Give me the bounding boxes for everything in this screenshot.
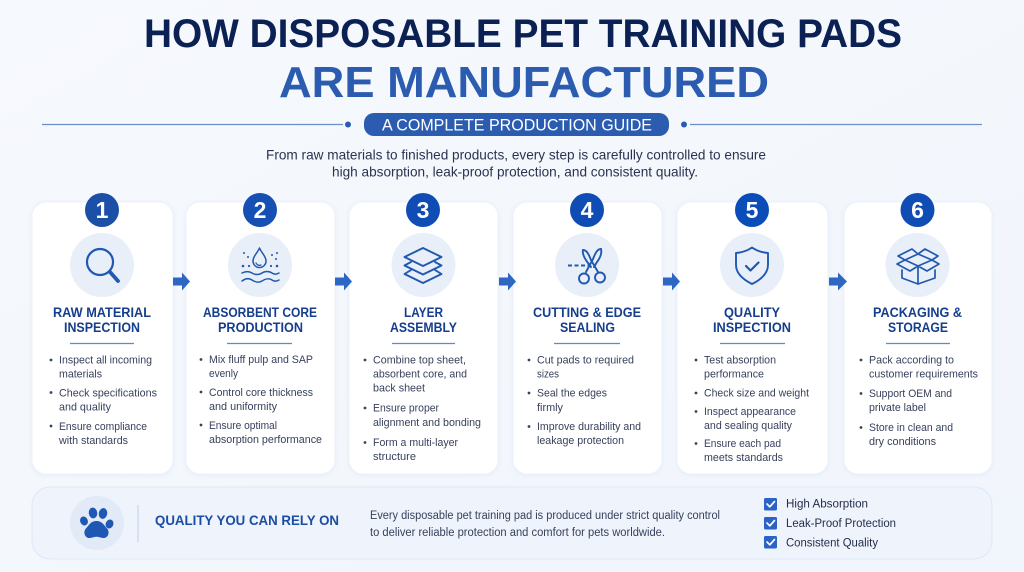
heading: INSPECTION — [713, 320, 791, 335]
title: ARE MANUFACTURED — [279, 58, 769, 107]
bullet list — [860, 354, 978, 448]
bullet list: sizes — [537, 368, 559, 380]
bullet list: Form a multi-layer — [373, 437, 458, 449]
heading: STORAGE — [888, 320, 948, 335]
arrow 4 to 5 — [663, 272, 680, 290]
step number 6 — [900, 193, 934, 227]
bullet list: Inspect appearance — [704, 406, 796, 418]
bullet list: with standards — [58, 435, 128, 447]
icon: magnifying glass — [70, 233, 134, 297]
subtitle banner: A COMPLETE PRODUCTION GUIDE — [382, 116, 652, 134]
bullet list: alignment and bonding — [373, 417, 481, 429]
checklist: High Absorption — [786, 498, 868, 510]
bullet list: back sheet — [373, 382, 425, 394]
bullet list — [364, 354, 481, 463]
arrow 5 to 6 — [829, 272, 847, 290]
icon: paw print — [70, 496, 124, 550]
panel: quality you can rely on — [32, 487, 992, 559]
bullet list: firmly — [537, 402, 563, 414]
callout text: Every disposable pet training pad is produced under strict quality control — [370, 510, 720, 522]
heading: ABSORBENT CORE — [203, 305, 317, 320]
callout text: to deliver reliable protection and comfort for pets worldwide. — [370, 527, 665, 539]
panel: step 6 packaging and storage — [844, 193, 992, 474]
bullet list: structure — [373, 451, 416, 463]
bullet list: Mix fluff pulp and SAP — [209, 354, 313, 366]
step number 4: 4 — [581, 197, 594, 223]
bullet list: meets standards — [704, 452, 783, 464]
step number 1 — [85, 193, 119, 227]
bullet list: dry conditions — [869, 436, 936, 448]
bullet list: customer requirements — [869, 368, 978, 380]
bullet list: Inspect all incoming — [59, 354, 152, 366]
step number 6: 6 — [911, 197, 924, 223]
bullet list: materials — [59, 368, 102, 380]
bullet list: Cut pads to required — [537, 354, 634, 366]
bullet list — [200, 354, 322, 446]
icon: water drop — [228, 233, 292, 297]
arrow 3 to 4 — [499, 272, 516, 290]
arrow 1 to 2 — [173, 272, 190, 290]
icon: layers — [392, 233, 456, 297]
bullet list — [50, 354, 157, 447]
step number 3 — [406, 193, 440, 227]
panel: step 3 layer assembly — [349, 193, 498, 474]
checklist: Consistent Quality — [786, 538, 878, 550]
bullet list: Test absorption — [704, 354, 776, 366]
callout heading: QUALITY YOU CAN RELY ON — [155, 512, 339, 528]
intro text: high absorption, leak-proof protection, and consistent quality. — [332, 164, 698, 180]
heading: ASSEMBLY — [390, 320, 457, 335]
bullet list: absorbent core, and — [373, 368, 467, 380]
bullet list: and uniformity — [209, 401, 277, 413]
checklist — [764, 498, 896, 550]
bullet list: and quality — [59, 402, 111, 414]
heading — [203, 305, 317, 335]
heading: CUTTING & EDGE — [533, 305, 641, 320]
panel: step 5 quality inspection — [677, 193, 828, 474]
bullet list: Check size and weight — [704, 388, 809, 400]
bullet list: evenly — [209, 368, 238, 380]
bullet list: Control core thickness — [209, 387, 313, 399]
bullet list — [528, 354, 641, 447]
heading: PACKAGING & — [873, 305, 962, 320]
bullet list: Ensure each pad — [704, 438, 781, 450]
bullet list: Support OEM and — [869, 388, 952, 400]
step number 5 — [735, 193, 769, 227]
icon: shield with check — [720, 233, 784, 297]
heading — [873, 305, 962, 335]
panel: step 1 raw material inspection — [32, 193, 173, 474]
heading: PRODUCTION — [218, 320, 303, 335]
intro text — [266, 146, 766, 180]
heading — [390, 305, 457, 335]
bullet list: Ensure proper — [373, 402, 439, 414]
step number 4 — [570, 193, 604, 227]
step number 5: 5 — [746, 197, 759, 223]
bullet list: Improve durability and — [537, 421, 641, 433]
bullet list: and sealing quality — [704, 420, 792, 432]
checklist: Leak-Proof Protection — [786, 518, 896, 530]
step number 3: 3 — [417, 197, 429, 223]
panel: step 2 absorbent core production — [186, 193, 335, 474]
bullet list: Combine top sheet, — [373, 354, 466, 366]
bullet list: Store in clean and — [869, 422, 953, 434]
title — [144, 12, 902, 107]
bullet list: absorption performance — [209, 434, 322, 446]
step number 2 — [243, 193, 277, 227]
bullet list: leakage protection — [537, 435, 624, 447]
heading: SEALING — [560, 320, 615, 335]
subtitle banner — [42, 113, 982, 136]
heading: QUALITY — [724, 305, 780, 320]
bullet list: performance — [704, 368, 764, 380]
bullet list — [695, 354, 809, 464]
bullet list: Pack according to — [869, 354, 954, 366]
panel: step 4 cutting and edge sealing — [513, 193, 662, 474]
heading: LAYER — [404, 305, 443, 320]
intro text: From raw materials to finished products, every step is carefully controlled to ensure — [266, 146, 766, 162]
icon: scissors — [555, 233, 619, 297]
step number 1: 1 — [96, 197, 109, 223]
heading — [53, 305, 151, 335]
bullet list: Check specifications — [59, 388, 157, 400]
step number 2: 2 — [254, 197, 266, 223]
callout text — [370, 510, 720, 539]
bullet list: private label — [869, 402, 926, 414]
heading: RAW MATERIAL — [53, 305, 151, 320]
heading — [533, 305, 641, 335]
bullet list: Seal the edges — [537, 388, 607, 400]
heading — [713, 305, 791, 335]
heading: INSPECTION — [64, 320, 140, 335]
bullet list: Ensure compliance — [59, 421, 147, 433]
title: HOW DISPOSABLE PET TRAINING PADS — [144, 12, 902, 56]
icon: open box — [886, 233, 950, 297]
arrow 2 to 3 — [335, 272, 352, 290]
bullet list: Ensure optimal — [209, 420, 277, 432]
